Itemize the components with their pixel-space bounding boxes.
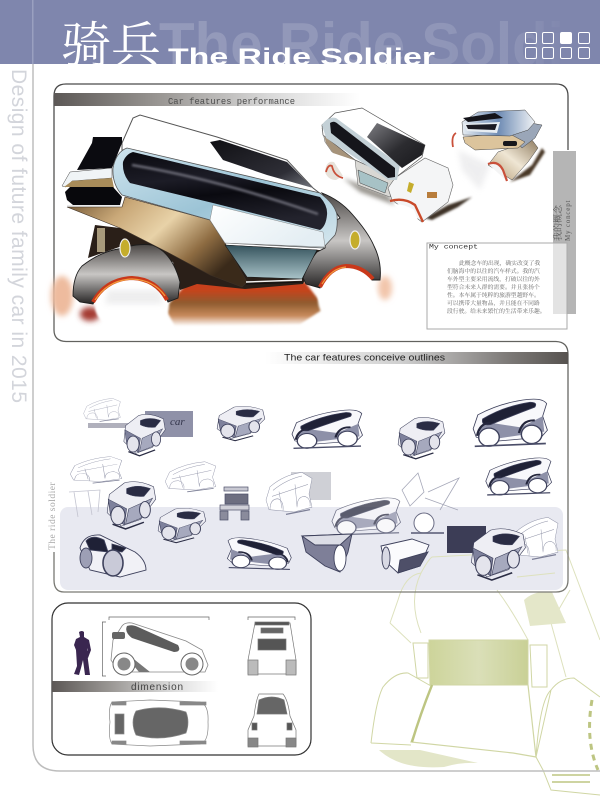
dimension bar	[52, 681, 218, 692]
sketch 5	[398, 417, 445, 459]
headlamp rear	[120, 239, 130, 257]
front wheel white	[318, 274, 376, 326]
section bar: car features performance	[54, 93, 360, 107]
vertical caption: The ride soldier	[48, 482, 58, 550]
teal door window	[225, 245, 317, 279]
front body	[388, 158, 453, 222]
sketch 3	[217, 406, 265, 441]
olive centre panel	[429, 640, 528, 685]
small car: three-quarter view	[322, 108, 472, 222]
sketch: car board	[88, 411, 193, 437]
length dimension line	[109, 617, 209, 620]
rear wheel white	[95, 280, 169, 332]
concept box heading: My concept	[429, 244, 478, 250]
dark roof window	[210, 140, 313, 188]
vertical side title: Design of future family car in 2015	[7, 69, 30, 403]
rear lamp housing	[65, 187, 122, 205]
background sketch: olive car rear view	[371, 550, 600, 795]
top pod	[462, 110, 535, 136]
sketch 6	[473, 399, 547, 446]
main car illustration	[51, 115, 392, 332]
sketch 14	[107, 482, 156, 529]
side elevation	[111, 623, 208, 675]
tan section	[463, 133, 525, 150]
front wheel	[390, 200, 423, 222]
concept paragraph: 们脑海中的以往的汽车样式。我的汽	[447, 267, 540, 275]
underbody	[88, 225, 320, 290]
sketch area backdrop	[60, 507, 563, 590]
sketch 23	[381, 539, 429, 573]
panel: dimension	[52, 603, 311, 755]
sketch 20	[80, 535, 146, 577]
front wheel arch	[303, 193, 380, 288]
rear wheel arch	[73, 244, 180, 304]
concept paragraph: 性。本车属于纯粹的旅游型越野车。	[447, 291, 540, 299]
sketch 19	[471, 517, 558, 580]
sketch 15	[158, 508, 206, 543]
dark roof panel	[367, 123, 425, 168]
top plan	[109, 700, 208, 746]
window frame	[113, 148, 337, 248]
sketch 21	[227, 538, 291, 569]
sketch 11	[402, 473, 459, 510]
sketch 22	[302, 534, 352, 572]
side tab: my concept	[552, 151, 576, 314]
sketch 4	[292, 410, 362, 448]
sketch 12	[486, 458, 552, 495]
page indicator grid	[526, 32, 590, 58]
height dimension line	[102, 622, 106, 676]
tab label English: My concept	[564, 200, 572, 241]
front elevation	[248, 694, 296, 747]
lower pod	[488, 140, 538, 180]
sketch 16	[332, 498, 401, 535]
concept text box	[427, 243, 567, 329]
human silhouette	[74, 631, 91, 675]
teal window	[358, 170, 388, 193]
tab label Chinese: 我的概念	[552, 204, 563, 241]
headlamp front	[350, 231, 360, 249]
header band	[0, 0, 600, 64]
roof	[322, 108, 425, 178]
lower side body	[322, 128, 395, 197]
tan lower body	[67, 197, 247, 287]
sketch 17: wheel	[411, 513, 444, 533]
panel outline: performance and outlines	[54, 84, 568, 592]
dimension label: dimension	[131, 682, 183, 693]
roof shell	[122, 115, 322, 195]
concept paragraph	[447, 259, 546, 315]
red wheels	[452, 133, 456, 147]
rear elevation	[248, 622, 296, 675]
sketch 13	[69, 490, 100, 517]
concept paragraph: 型符合未来人群的需要。并且张扬个	[447, 283, 540, 291]
width dimension line	[248, 617, 295, 620]
concept paragraph: 车外型主要采用流线，打破以往的外	[447, 275, 540, 283]
concept paragraph: 段行驶。给未来繁忙的生活带来乐趣。	[447, 307, 546, 315]
title: Chinese: 骑兵	[61, 18, 161, 74]
white door	[210, 205, 325, 247]
sketch 9: seat	[220, 487, 249, 520]
sketch 1	[84, 398, 120, 421]
concept paragraph: 此概念车的出现，确实改变了我	[459, 259, 540, 267]
section bar: conceive outlines	[265, 352, 568, 364]
small car: folded rear view	[452, 110, 545, 190]
section bar: car features performance: Car features performance	[168, 97, 295, 107]
sketch: car board: car	[170, 416, 185, 428]
sketch 18: dark swatch	[447, 526, 486, 553]
title: English: The Ride Soldier	[168, 44, 435, 71]
large dark side window	[123, 152, 327, 230]
cast shadow	[425, 197, 472, 220]
rear light band	[62, 168, 112, 187]
concept paragraph: 可以携带大量物品，并且能在不同路	[447, 299, 540, 307]
sketch 10	[266, 472, 331, 514]
side window	[330, 122, 395, 178]
section bar: conceive outlines: The car features conceive outlines	[284, 352, 446, 362]
sketch 2	[124, 414, 165, 456]
sketch 8	[165, 462, 216, 492]
sketch 7	[70, 457, 122, 483]
rear cap black	[77, 137, 122, 170]
upper right pod	[512, 122, 542, 148]
side window frame	[322, 118, 400, 180]
rear wheel	[325, 162, 343, 180]
ground glow	[165, 280, 325, 326]
